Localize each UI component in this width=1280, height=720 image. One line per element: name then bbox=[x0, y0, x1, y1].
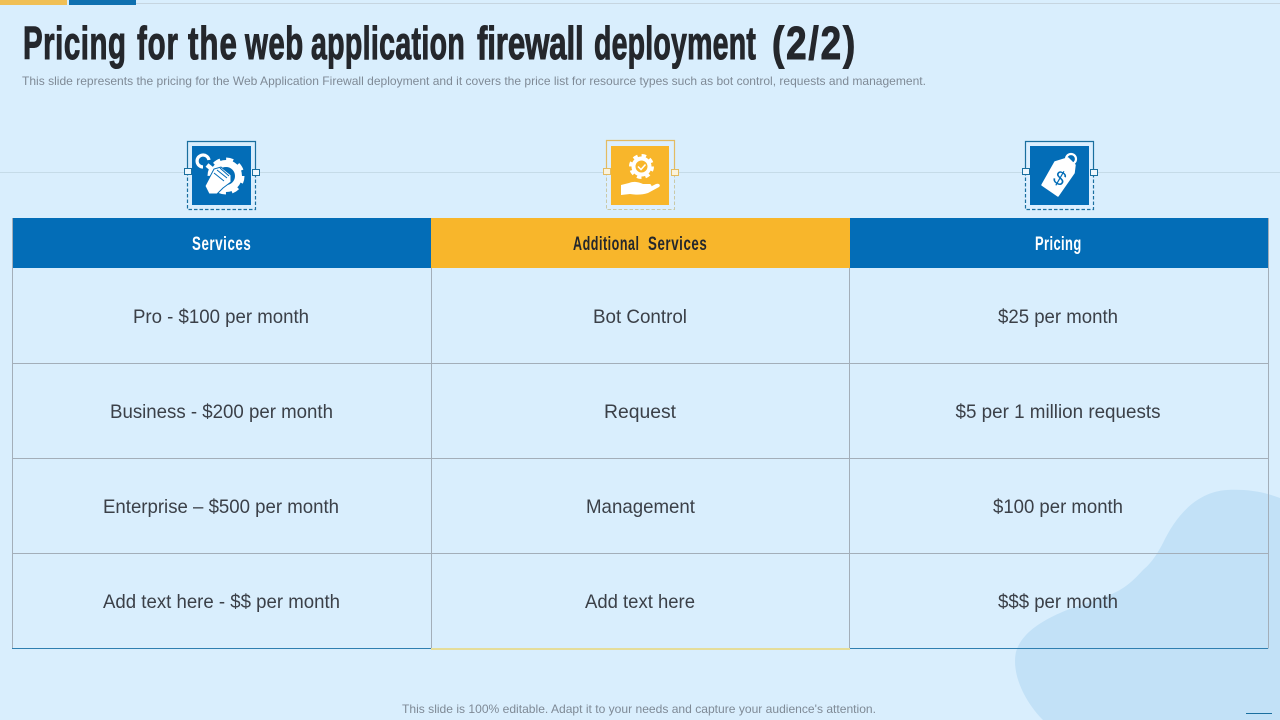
top accent bars bbox=[0, 0, 1280, 5]
header: additional services: Services bbox=[648, 234, 707, 255]
table grid bbox=[12, 218, 1268, 648]
title: web bbox=[244, 19, 303, 70]
table bottom rule bbox=[12, 648, 1268, 650]
title: Pricing bbox=[23, 19, 126, 70]
row 2 bbox=[110, 401, 1161, 423]
footer note: This slide is 100% editable. Adapt it to your needs and capture your audience's attention. bbox=[402, 702, 876, 716]
row 2: $5 per 1 million requests bbox=[956, 401, 1161, 423]
row 3: Management bbox=[586, 496, 696, 518]
title: the bbox=[188, 18, 237, 70]
row 1: $25 per month bbox=[998, 306, 1118, 328]
row 4: $$$ per month bbox=[998, 591, 1118, 613]
row 3: Enterprise – $500 per month bbox=[103, 496, 339, 518]
header: pricing: Pricing bbox=[1035, 234, 1081, 255]
title: application bbox=[311, 18, 465, 70]
row 4: Add text here - $$ per month bbox=[103, 591, 340, 613]
icon: gear in open hand bbox=[604, 140, 678, 210]
row 2: Request bbox=[604, 401, 677, 423]
row 1: Pro - $100 per month bbox=[133, 306, 309, 328]
row 1: Bot Control bbox=[593, 306, 687, 328]
page number rule bbox=[1246, 713, 1272, 714]
icon: price tag bbox=[1022, 142, 1098, 210]
row 2: Business - $200 per month bbox=[110, 401, 333, 423]
title: (2/2) bbox=[772, 17, 855, 69]
title: firewall bbox=[477, 18, 584, 70]
header: services: Services bbox=[192, 234, 251, 255]
title: for bbox=[137, 19, 178, 70]
title: deployment bbox=[594, 18, 756, 70]
header: additional services: Additional bbox=[573, 233, 639, 255]
table bbox=[12, 218, 1268, 650]
title bbox=[23, 17, 855, 70]
row 4 bbox=[103, 591, 1118, 613]
header: additional services bbox=[431, 218, 850, 268]
icon: wrench and gear bbox=[184, 142, 260, 210]
subtitle: This slide represents the pricing for the Web Application Firewall deployment and it covers the price list for resource types such as bot control, requests and management. bbox=[22, 74, 926, 88]
row 4: Add text here bbox=[585, 591, 695, 613]
row 3: $100 per month bbox=[993, 496, 1123, 518]
row 3 bbox=[103, 496, 1123, 518]
row 1 bbox=[133, 306, 1118, 328]
horizontal guide line bbox=[0, 172, 1280, 173]
header: pricing bbox=[850, 218, 1268, 268]
header: services bbox=[12, 218, 431, 268]
decorative blob bbox=[1015, 490, 1280, 720]
icon: price tag: $ bbox=[1049, 167, 1070, 191]
